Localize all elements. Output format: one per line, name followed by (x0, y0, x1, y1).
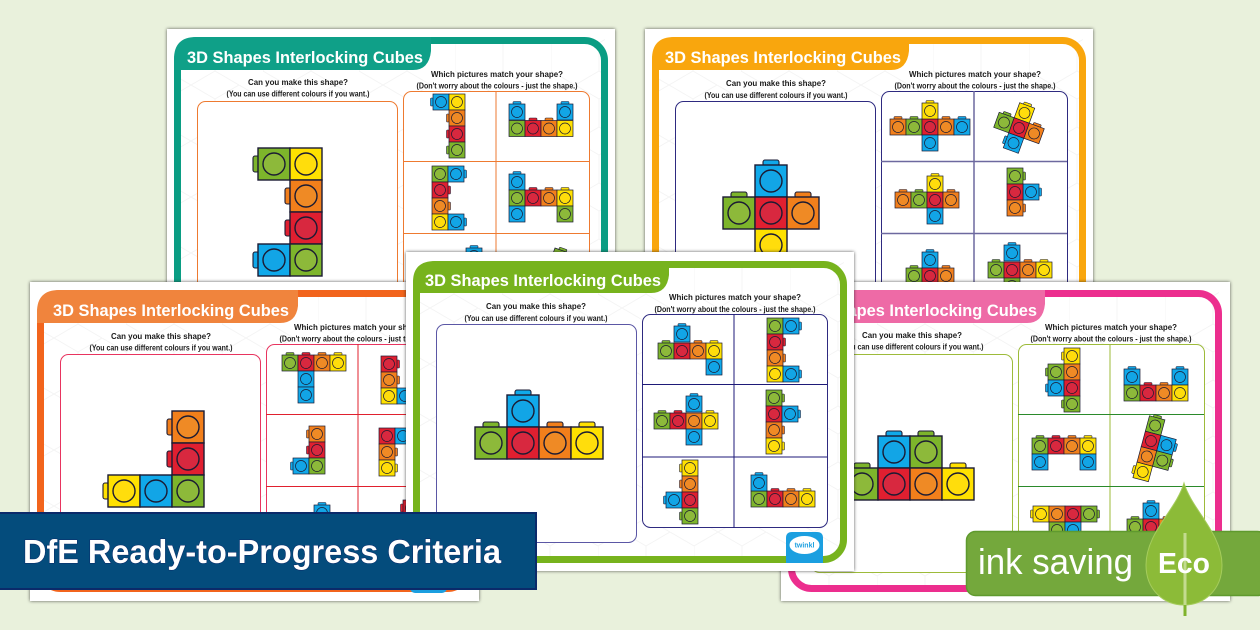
panel: green worksheet: (Don't worry about the colours - just the shape.) (654, 304, 816, 314)
panel: green worksheet: Which pictures match your shape? (669, 292, 801, 302)
panel: teal worksheet: Which pictures match your shape? (431, 69, 563, 79)
panel: orange worksheet: 3D Shapes Interlocking Cubes (53, 301, 289, 320)
panel: teal worksheet: (Don't worry about the colours - just the shape.) (416, 80, 578, 90)
panel: teal worksheet (167, 29, 615, 348)
panel: teal worksheet: (You can use different colours if you want.) (226, 88, 370, 98)
panel: orange worksheet: (You can use different colours if you want.) (90, 342, 233, 352)
panel: amber worksheet (645, 29, 1093, 348)
badge: ink saving Eco: ink saving (978, 541, 1133, 582)
panel: amber worksheet: (You can use different colours if you want.) (704, 90, 848, 100)
banner: DfE Ready-to-Progress Criteria: DfE Ready-to-Progress Criteria (23, 533, 502, 570)
panel: green worksheet: (You can use different colours if you want.) (464, 313, 608, 323)
icon: leaf (1146, 483, 1222, 616)
panel: pink worksheet: 3D Shapes Interlocking Cubes (801, 301, 1037, 320)
icon: twinkl logo: twinkl (795, 542, 814, 550)
badge: ink saving Eco (966, 483, 1260, 616)
panel: orange worksheet: Can you make this shape? (111, 331, 211, 341)
panel: amber worksheet: Can you make this shape? (726, 78, 826, 88)
panel: green worksheet: 3D Shapes Interlocking Cubes (425, 271, 661, 290)
panel: pink worksheet (781, 282, 1230, 601)
panel: orange worksheet (30, 282, 479, 601)
panel: orange worksheet: (Don't worry about the colours - just the shape.) (280, 334, 441, 344)
panel: pink worksheet: Which pictures match your shape? (1045, 322, 1177, 332)
panel: green worksheet (406, 252, 854, 571)
panel: amber worksheet: Which pictures match your shape? (909, 69, 1041, 79)
panel: teal worksheet: Can you make this shape? (248, 77, 348, 87)
panel: amber worksheet: 3D Shapes Interlocking Cubes (665, 48, 901, 67)
icon: twinkl logo (786, 532, 823, 563)
panel: teal worksheet: 3D Shapes Interlocking Cubes (187, 48, 423, 67)
panel: amber worksheet: (Don't worry about the colours - just the shape.) (894, 80, 1056, 90)
banner: DfE Ready-to-Progress Criteria (0, 513, 536, 589)
panel: pink worksheet: Can you make this shape? (862, 330, 962, 340)
panel: green worksheet: Can you make this shape? (486, 301, 586, 311)
badge: ink saving Eco: Eco (1158, 548, 1210, 580)
panel: pink worksheet: (You can use different colours if you want.) (840, 342, 984, 352)
panel: orange worksheet: Which pictures match your shape? (294, 322, 426, 332)
panel: pink worksheet: (Don't worry about the colours - just the shape.) (1030, 334, 1192, 344)
